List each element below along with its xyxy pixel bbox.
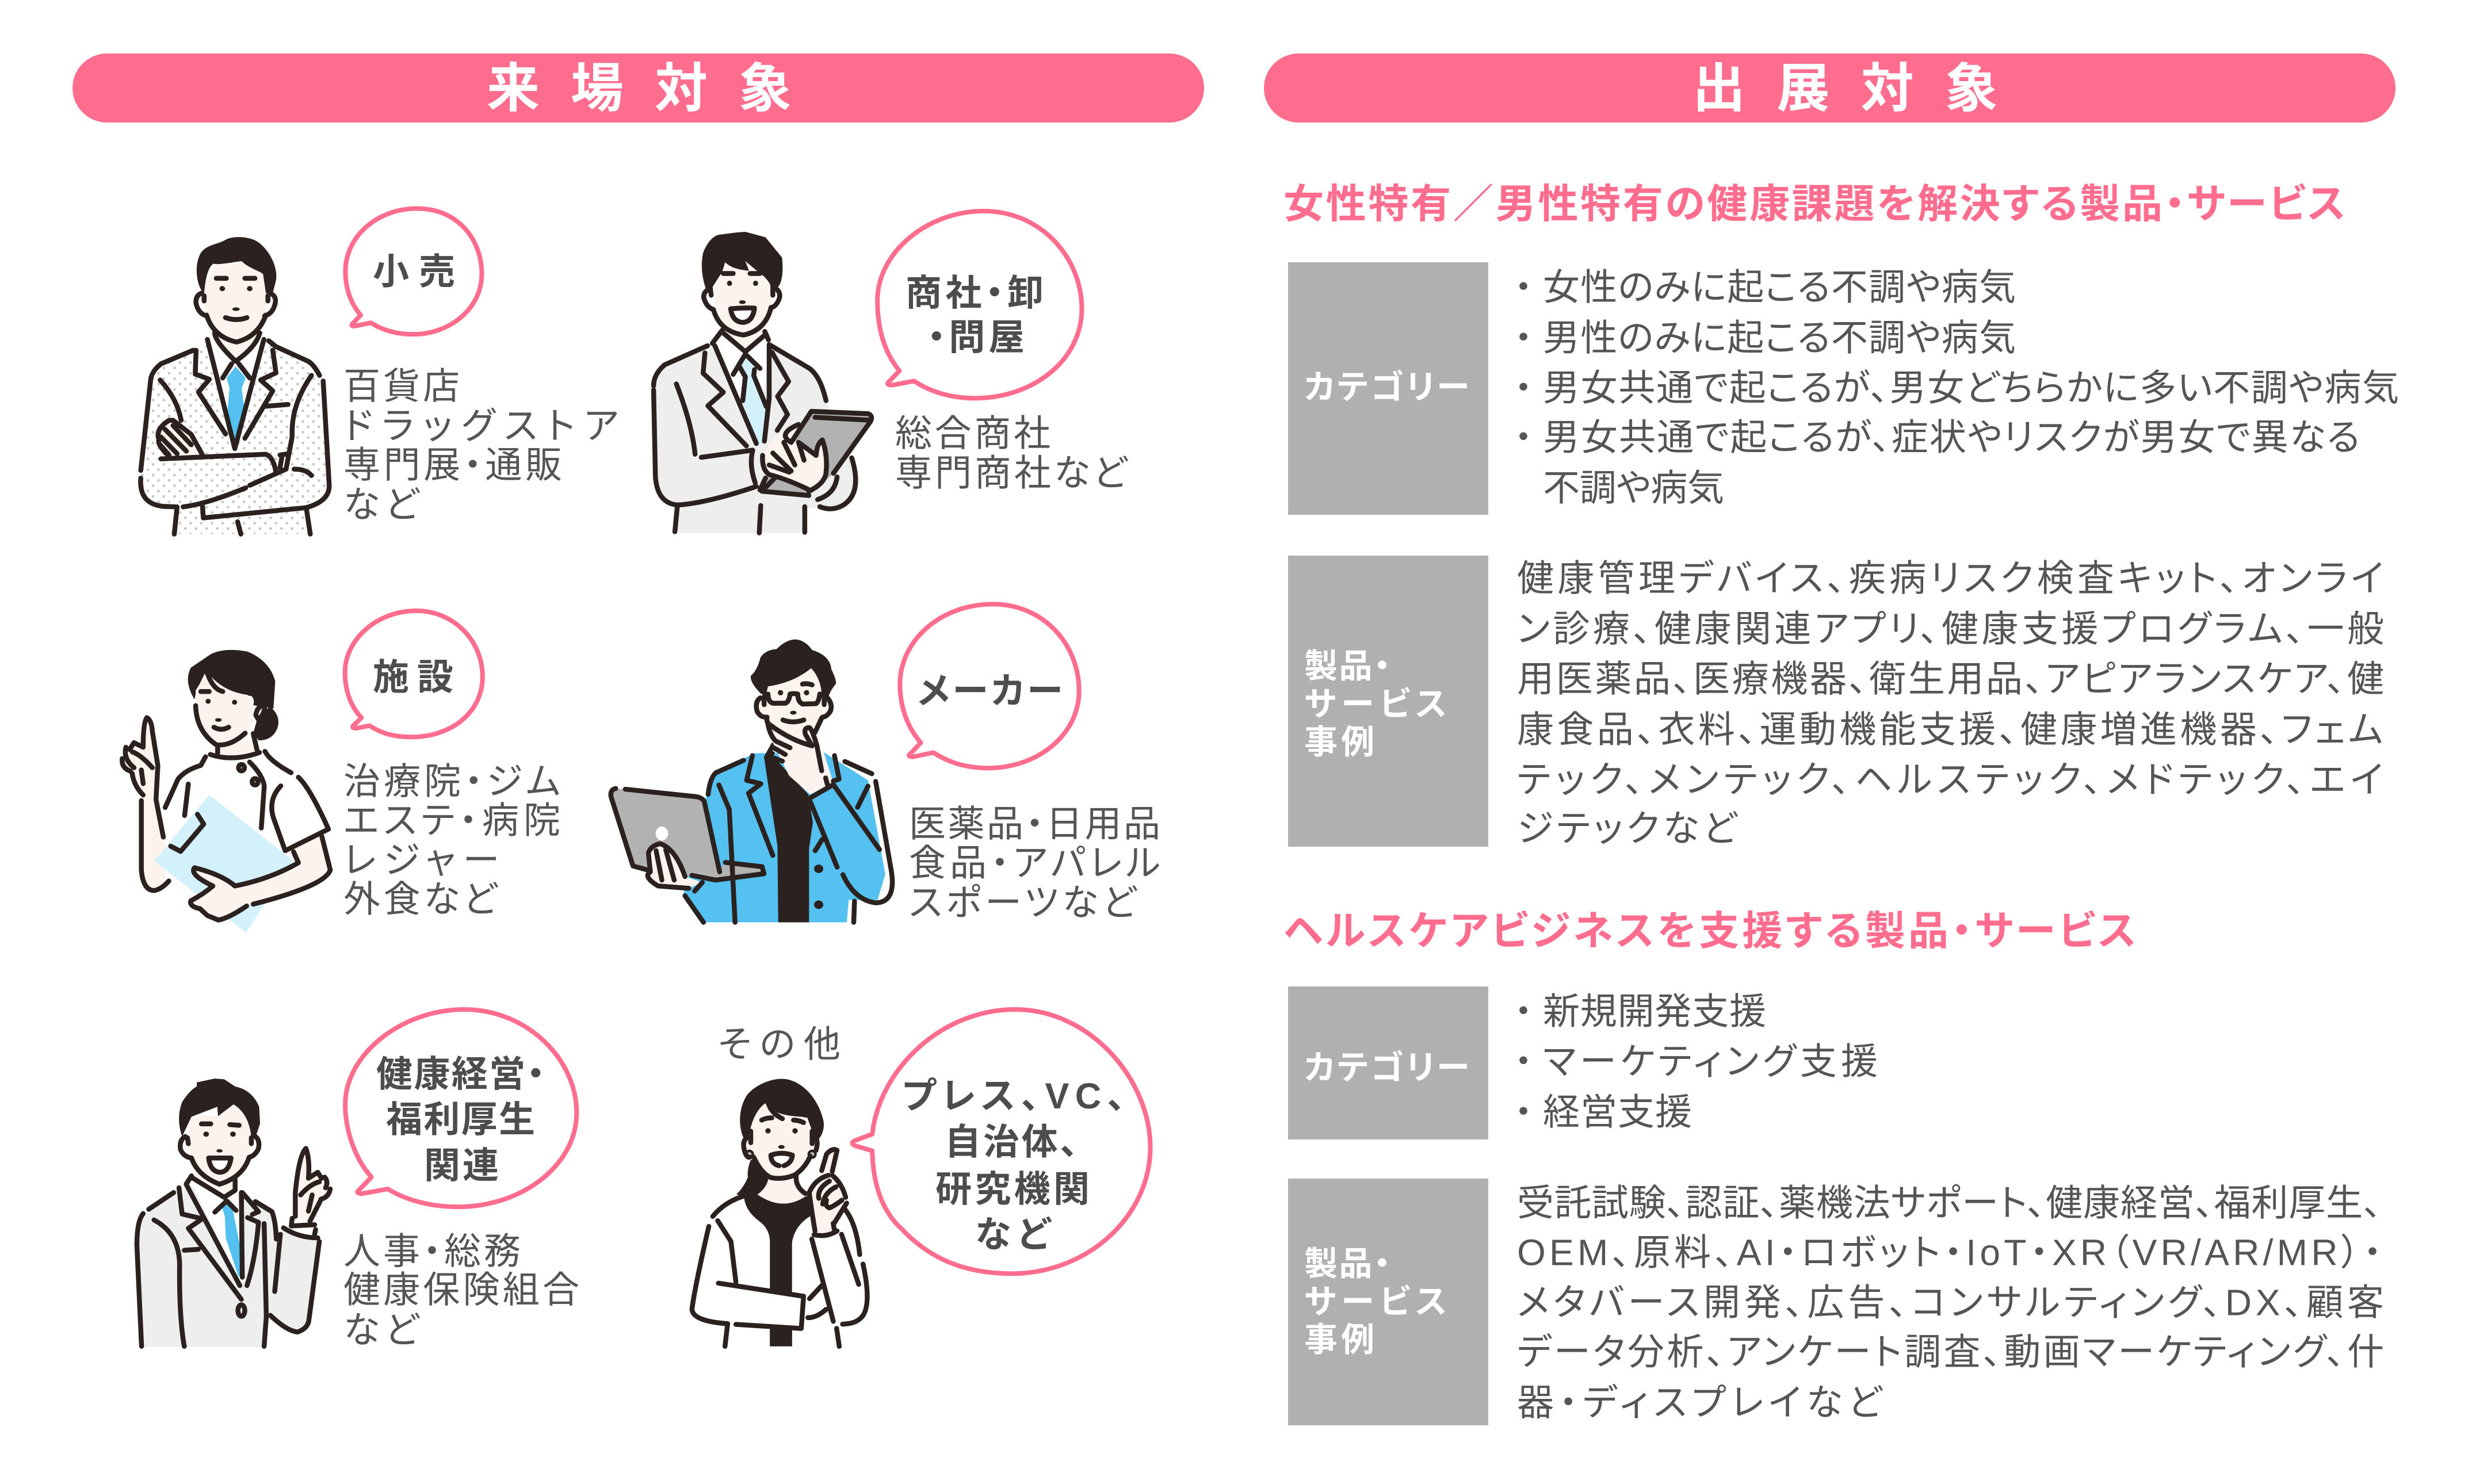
text block: product examples 2: 器・ディスプレイなど xyxy=(1517,1382,1884,1423)
text block: category list 1: ・ xyxy=(1505,318,1542,359)
text: 小売 examples: ドラッグストア xyxy=(343,405,618,446)
label box: 製品・サービス事例 2: 事例 xyxy=(1304,1321,1374,1359)
text block: product examples 1: ジテックなど xyxy=(1517,808,1739,849)
label box: カテゴリー 1 xyxy=(1288,262,1488,515)
text: 小売 examples xyxy=(343,366,618,526)
illustration: nurse with clipboard xyxy=(121,650,330,932)
label box: 製品・サービス事例 1: 事例 xyxy=(1304,724,1374,761)
text: 小売 examples: 専門展・通販 xyxy=(343,444,562,485)
text block: category list 2: ・ xyxy=(1505,1041,1542,1083)
panel: 健康経営 visitor xyxy=(137,1009,579,1351)
text block: product examples 1: 健康管理デバイス、疾病リスク検査キット、オンライ xyxy=(1517,558,2383,599)
text block: product examples 2: メタバース開発、広告、コンサルティング、DX、顧客 xyxy=(1517,1282,2384,1323)
text: メーカー examples: 食品・アパレル xyxy=(909,842,1160,883)
label box: 製品・サービス事例 1 xyxy=(1288,556,1488,847)
panel: 出展対象 header xyxy=(1264,53,2396,123)
label box: カテゴリー 1: カテゴリー xyxy=(1304,369,1469,406)
text block: category list 2: マーケティング支援 xyxy=(1543,1041,1878,1083)
label: 健康経営・福利厚生関連: 健康経営・ xyxy=(376,1054,545,1095)
speech bubble: 小売 xyxy=(345,208,482,334)
panel: 小売 visitor xyxy=(140,208,618,534)
label: 健康経営・福利厚生関連: 福利厚生 xyxy=(386,1100,535,1140)
label: 商社・卸・問屋 xyxy=(906,273,1044,358)
text block: product examples 2 xyxy=(1517,1183,2384,1423)
speech bubble: 施設 xyxy=(345,611,483,737)
label box: 製品・サービス事例 2: 製品・ xyxy=(1304,1245,1390,1283)
text: 健康経営 examples: 人事・総務 xyxy=(343,1231,521,1272)
text block: category list 1: ・ xyxy=(1505,416,1542,458)
text: 小売 examples: など xyxy=(343,484,421,526)
label box: 製品・サービス事例 1: サービス xyxy=(1304,686,1447,723)
text: その他: その他 xyxy=(718,1024,841,1065)
panel: 商社・卸・問屋 visitor xyxy=(654,211,1129,533)
text block: product examples 1: 康食品、衣料、運動機能支援、健康増進機器、フェム xyxy=(1517,709,2383,750)
text block: category list 1: 女性のみに起こる不調や病気 xyxy=(1543,267,2016,308)
label box: カテゴリー 2: カテゴリー xyxy=(1304,1049,1469,1087)
illustration: man with tablet xyxy=(654,232,872,533)
text block: category list 1: 男女共通で起こるが、症状やリスクが男女で異なる xyxy=(1543,416,2360,458)
text block: category list 2 xyxy=(1505,990,1878,1133)
panel: 来場対象 header xyxy=(72,53,1204,123)
heading: 来場対象: 来場対象 xyxy=(487,60,792,118)
text: 小売 examples: 百貨店 xyxy=(343,366,460,407)
text: メーカー examples xyxy=(909,803,1160,924)
heading: ヘルスケアビジネスを支援: ヘルスケアビジネスを支援する製品・サービス xyxy=(1283,909,2136,954)
illustration: woman pointing up xyxy=(692,1079,868,1347)
panel: 施設 visitor xyxy=(121,611,560,932)
text: 商社 examples xyxy=(895,413,1129,494)
heading: 女性特有／男性特有の健康課題: 女性特有／男性特有の健康課題を解決する製品・サービス xyxy=(1283,182,2345,227)
label: プレス、VC、自治体、研究機関など: 自治体、 xyxy=(945,1122,1078,1162)
text block: product examples 1: テック、メンテック、ヘルステック、メドテック、エイ xyxy=(1517,759,2383,801)
text: 施設 examples: レジャー xyxy=(343,840,499,881)
text: 健康経営 examples: など xyxy=(343,1309,421,1351)
panel: メーカー visitor xyxy=(611,604,1160,924)
text block: category list 1: 男女共通で起こるが、男女どちらかに多い不調や病気 xyxy=(1543,367,2399,408)
text: 商社 examples: 総合商社 xyxy=(895,413,1050,454)
label: 健康経営・福利厚生関連 xyxy=(376,1054,545,1186)
speech bubble: メーカー xyxy=(900,604,1079,768)
text block: product examples 1 xyxy=(1517,558,2384,849)
text block: category list 2: 経営支援 xyxy=(1543,1092,1692,1133)
label: 商社・卸・問屋: ・問屋 xyxy=(927,318,1025,358)
text: 健康経営 examples: 健康保険組合 xyxy=(343,1269,579,1310)
illustration: man pointing up xyxy=(137,1078,330,1347)
illustration: man with glasses and laptop xyxy=(611,640,892,923)
panel: その他 visitor xyxy=(692,1009,1151,1347)
text block: category list 1 xyxy=(1505,267,2399,508)
label: メーカー: メーカー xyxy=(918,671,1063,712)
text block: category list 1: 不調や病気 xyxy=(1543,467,1724,508)
text: 施設 examples: エステ・病院 xyxy=(343,800,560,841)
label: 健康経営・福利厚生関連: 関連 xyxy=(424,1146,499,1186)
label: プレス、VC、自治体、研究機関など xyxy=(902,1076,1125,1255)
text: 施設 examples xyxy=(343,760,560,920)
text block: category list 1: 男性のみに起こる不調や病気 xyxy=(1543,318,2016,359)
speech bubble: 商社・卸・問屋 xyxy=(877,211,1082,398)
illustration: man with crossed arms xyxy=(140,237,329,534)
text block: product examples 2: OEM、原料、AI・ロボット・IoT・XR（VR/AR/MR）・ xyxy=(1517,1232,2382,1273)
text block: category list 2: 新規開発支援 xyxy=(1543,990,1766,1032)
label box: カテゴリー 2 xyxy=(1288,986,1488,1139)
heading: 出展対象: 出展対象 xyxy=(1693,60,1998,118)
text: 施設 examples: 外食など xyxy=(343,879,499,920)
text block: category list 2: ・ xyxy=(1505,990,1542,1032)
text block: category list 2: ・ xyxy=(1505,1092,1542,1133)
text block: product examples 2: データ分析、アンケート調査、動画マーケティング、什 xyxy=(1517,1331,2384,1372)
text block: product examples 1: 用医薬品、医療機器、衛生用品、アピアランスケア、健 xyxy=(1517,658,2384,699)
text: 施設 examples: 治療院・ジム xyxy=(343,760,560,802)
text block: product examples 1: ン診療、健康関連アプリ、健康支援プログラム、一般 xyxy=(1517,609,2384,650)
label: プレス、VC、自治体、研究機関など: 研究機関 xyxy=(935,1169,1090,1210)
label: 施設: 施設 xyxy=(373,657,453,698)
label: プレス、VC、自治体、研究機関など: プレス、VC、 xyxy=(902,1076,1125,1116)
speech bubble: 健康経営 xyxy=(345,1009,576,1207)
text block: category list 1: ・ xyxy=(1505,267,1542,308)
label: 商社・卸・問屋: 商社・卸 xyxy=(906,273,1044,313)
text block: category list 1: ・ xyxy=(1505,367,1542,408)
text: 健康経営 examples xyxy=(343,1231,579,1351)
speech bubble: プレス・VC xyxy=(852,1009,1151,1273)
label: プレス、VC、自治体、研究機関など: など xyxy=(975,1215,1052,1255)
label box: 製品・サービス事例 1: 製品・ xyxy=(1304,648,1390,685)
label box: 製品・サービス事例 2: サービス xyxy=(1304,1283,1447,1321)
text: メーカー examples: スポーツなど xyxy=(909,882,1138,924)
label box: 製品・サービス事例 2 xyxy=(1288,1179,1488,1425)
text: 商社 examples: 専門商社など xyxy=(895,452,1129,494)
text block: product examples 2: 受託試験、認証、薬機法サポート、健康経営、福利厚生、 xyxy=(1517,1183,2382,1224)
text: メーカー examples: 医薬品・日用品 xyxy=(909,803,1160,844)
label: 小売: 小売 xyxy=(373,252,455,292)
